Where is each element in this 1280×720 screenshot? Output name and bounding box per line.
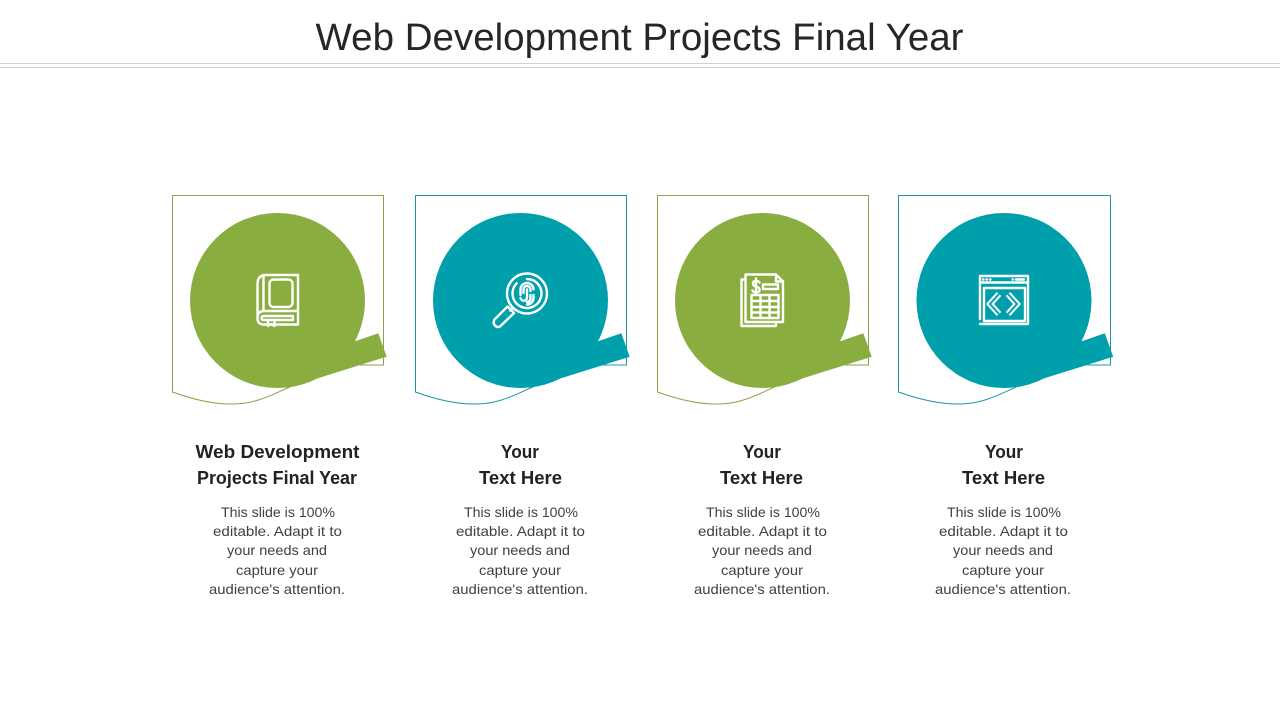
body text: capture your (479, 562, 561, 578)
body text: your needs and (953, 542, 1053, 558)
icon: invoice document (742, 274, 783, 326)
body text: your needs and (227, 542, 327, 558)
speech badge (916, 213, 1113, 388)
speech badge (675, 213, 872, 388)
body text: capture your (962, 562, 1044, 578)
card outline (416, 196, 626, 404)
heading: Your (743, 442, 781, 462)
body text (935, 504, 1071, 597)
title: Web Development Projects Final Year (316, 17, 964, 59)
body text (209, 504, 345, 597)
icon: book (258, 275, 298, 326)
body text (452, 504, 588, 597)
body text: This slide is 100% (947, 504, 1061, 520)
panel: your text here, financial document (658, 196, 872, 597)
heading: Your (501, 442, 539, 462)
body text: capture your (721, 562, 803, 578)
card outline (172, 196, 384, 404)
body text: audience's attention. (694, 581, 830, 597)
body text: editable. Adapt it to (456, 523, 585, 539)
icon: code browser window (980, 276, 1028, 324)
body text: editable. Adapt it to (698, 523, 827, 539)
body text: audience's attention. (209, 581, 345, 597)
icon: magnifier with fingerprint (494, 274, 547, 327)
body text: This slide is 100% (464, 504, 578, 520)
heading: Your (985, 442, 1023, 462)
body text: audience's attention. (935, 581, 1071, 597)
body text: audience's attention. (452, 581, 588, 597)
speech badge (190, 213, 387, 388)
body text: your needs and (470, 542, 570, 558)
body text: capture your (236, 562, 318, 578)
card outline (658, 196, 868, 404)
body text: editable. Adapt it to (939, 523, 1068, 539)
panel: your text here, code window (898, 196, 1113, 597)
heading: Web Development (196, 442, 360, 462)
heading line 2: Text Here (962, 468, 1045, 488)
body text: editable. Adapt it to (213, 523, 342, 539)
heading line 2: Projects Final Year (197, 468, 357, 488)
heading line 2: Text Here (479, 468, 562, 488)
panel: web development projects (172, 196, 387, 597)
body text: your needs and (712, 542, 812, 558)
body text (694, 504, 830, 597)
heading line 2: Text Here (720, 468, 803, 488)
card outline (898, 196, 1110, 404)
panel: your text here, fingerprint search (416, 196, 630, 597)
body text: This slide is 100% (706, 504, 820, 520)
body text: This slide is 100% (221, 504, 335, 520)
speech badge (433, 213, 630, 388)
